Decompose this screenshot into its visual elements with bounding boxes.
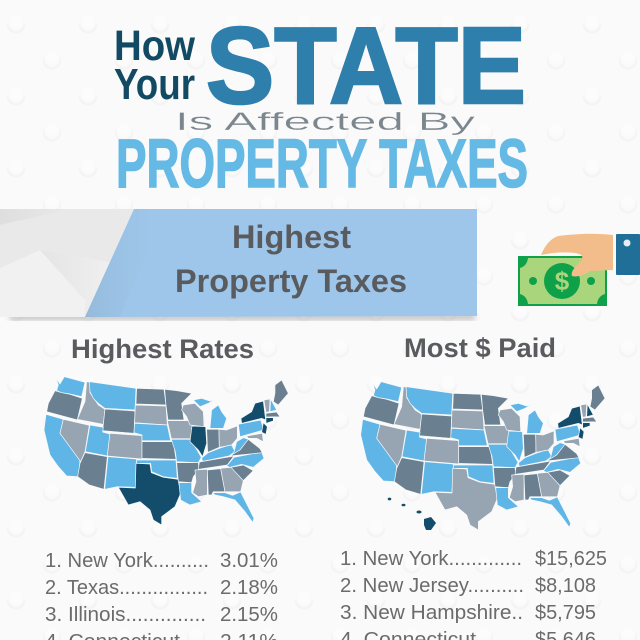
list: highest rates: 2.15%	[220, 604, 278, 626]
list: highest rates: 2. Texas................	[45, 577, 208, 599]
title: how your: Your	[114, 60, 195, 109]
list: most paid: $8,108	[535, 575, 596, 597]
panel: highest rates	[44, 334, 288, 640]
list: most paid: $15,625	[535, 548, 607, 570]
list: highest rates: 3.01%	[220, 550, 278, 572]
map: most paid	[361, 382, 605, 530]
icon: banknote: $	[555, 266, 570, 296]
list: highest rates: 1. New York..........	[45, 550, 209, 572]
title: state: STATE	[206, 5, 526, 127]
list: most paid: 2. New Jersey..........	[340, 575, 524, 597]
list: most paid: 1. New York.............	[340, 548, 522, 570]
list: most paid	[340, 548, 607, 640]
banner blue panel	[85, 209, 477, 317]
list: highest rates: 2.18%	[220, 577, 278, 599]
heading: highest rates: Highest Rates	[71, 334, 254, 364]
title: how your	[114, 22, 195, 109]
icon: hand holding money	[518, 234, 640, 306]
title	[114, 5, 528, 202]
banner	[0, 209, 477, 320]
title: is affected by: Is Affected By	[175, 108, 476, 136]
banner heading: Highest	[232, 219, 351, 255]
icon: hand	[541, 234, 613, 276]
icon: cuff	[616, 234, 640, 275]
banner heading: Property Taxes	[175, 263, 407, 299]
banner ribbon	[0, 209, 134, 317]
banner heading	[175, 219, 407, 299]
list: highest rates: 3. Illinois..............	[45, 604, 206, 626]
map: highest rates	[44, 377, 288, 525]
heading: most paid: Most $ Paid	[404, 333, 556, 363]
banner shadow	[10, 314, 475, 320]
panel: most paid	[340, 333, 607, 640]
list: most paid: 3. New Hampshire..	[340, 602, 523, 624]
title: how your: How	[114, 22, 195, 70]
list: most paid: $5,795	[535, 602, 596, 624]
map: hawaii	[388, 498, 436, 530]
list: highest rates	[45, 550, 278, 640]
